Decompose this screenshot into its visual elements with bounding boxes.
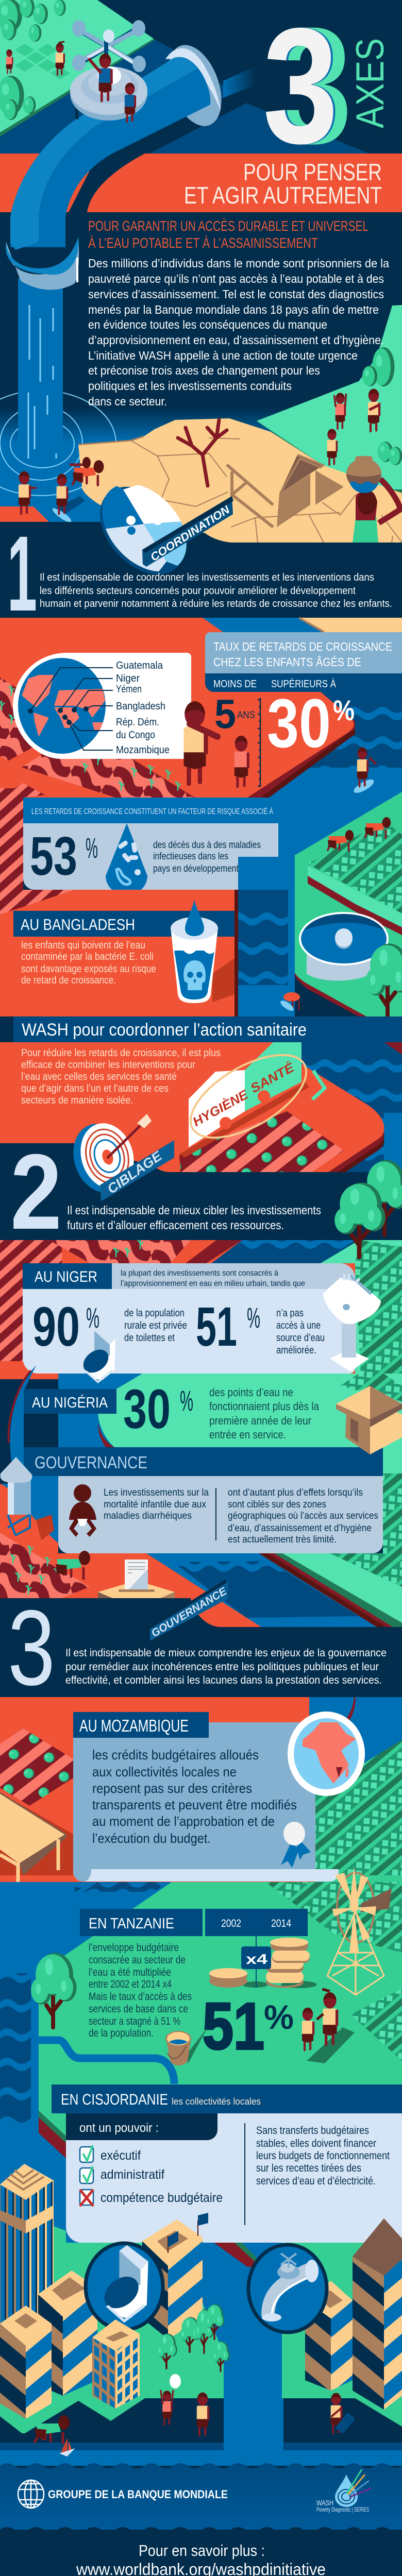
country labels: Rép. Dém. xyxy=(116,717,159,728)
illustration: target with arrow xyxy=(65,1114,152,1200)
years 2002 2014 xyxy=(205,1909,308,1936)
illustration: cracked earth xyxy=(78,418,402,543)
checklist xyxy=(80,2145,223,2206)
panel: Mozambique scroll: reposent pas sur des critères xyxy=(92,1781,252,1796)
panel: West Bank xyxy=(52,2084,402,2243)
panel: Au Niger: la plupart des investissements sont consacrés à xyxy=(121,1269,278,1278)
numeral 1: 1 xyxy=(7,514,37,634)
illustration: side field xyxy=(383,1447,402,1555)
WASH text: secteurs de manière isolée. xyxy=(21,1095,133,1106)
banner: ciblage: CIBLAGE xyxy=(104,1148,165,1197)
Nigeria text: fonctionnaient plus dès la xyxy=(209,1400,320,1413)
stat: 51 percent: 51 xyxy=(196,1295,237,1358)
icon: windmill xyxy=(327,1867,392,1995)
illustration: tap base and handle xyxy=(70,20,147,121)
illustration: child on the water xyxy=(352,748,376,795)
illustration: hygiene and health puzzle xyxy=(178,1038,325,1155)
intro text: services d’assainissement. Tel est le constat des diagnostics xyxy=(88,287,384,301)
panel: Mozambique scroll: aux collectivités locales ne xyxy=(92,1764,237,1780)
panel: West Bank: ont un pouvoir : xyxy=(79,2121,159,2135)
axis 3 text xyxy=(65,1647,387,1686)
country labels: Niger xyxy=(116,673,140,684)
intro text: pauvreté parce qu’ils n’ont pas accès à l’eau potable et à des xyxy=(88,272,384,285)
Tanzania text: l’enveloppe budgétaire xyxy=(89,1942,179,1954)
panel: stunting rate xyxy=(205,632,402,787)
illustration: tree in Tanzania xyxy=(31,1953,76,2027)
illustration: Mozambique background xyxy=(0,1697,402,1943)
illustration: hygiene and health puzzle: HYGIÈNE xyxy=(190,1087,251,1129)
panel: Mozambique scroll xyxy=(73,1712,339,1882)
banner: Au Nigeria: AU NIGÉRIA xyxy=(32,1394,108,1411)
panel: Au Niger: n’a pas xyxy=(276,1308,304,1319)
axis 3 text: effectivité, et combler ainsi les lacunes dans la prestation des services. xyxy=(65,1674,382,1686)
panel: Au Niger: accès à une xyxy=(276,1320,321,1331)
icon: water tower xyxy=(1,1457,32,1535)
illustration: ballot box xyxy=(98,1560,175,1634)
illustration: water pipe and tap xyxy=(10,38,231,250)
intro text: politiques et les investissements conduits xyxy=(88,379,292,393)
banner: Au Nigeria xyxy=(24,1389,116,1414)
Tanzania text xyxy=(89,1942,192,2039)
panel: governance details xyxy=(58,1476,383,1553)
Tanzania text: services de base dans ce xyxy=(89,2003,188,2015)
banner: Au Bangladesh xyxy=(13,911,234,937)
illustration: skyscraper xyxy=(0,2164,54,2324)
axis 1 text: les différents secteurs concernés pour pouvoir améliorer le développement xyxy=(40,585,356,597)
Nigeria text: des points d’eau ne xyxy=(209,1386,293,1399)
panel: stunting risk factor: LES RETARDS DE CROISSANCE CONSTITUENT UN FACTEUR DE RISQUE ASSOCIÉ À xyxy=(31,806,273,816)
illustration: building G and F xyxy=(305,2218,402,2410)
checklist: compétence budgétaire xyxy=(100,2191,223,2205)
Tanzania text: secteur a stagné à 51 % xyxy=(89,2015,180,2027)
Tanzania text: l’eau a été multipliée xyxy=(89,1967,171,1978)
country labels: du Congo xyxy=(116,730,155,741)
axis 1 text xyxy=(40,572,392,609)
WASH text: que d’agir dans l’un et l’autre de ces xyxy=(21,1083,169,1094)
panel: stunting risk factor xyxy=(23,798,278,895)
icon: germ drop xyxy=(106,823,147,895)
WASH text: efficace de combiner les interventions pour xyxy=(21,1059,195,1071)
stat: 90 percent: % xyxy=(86,1301,99,1334)
panel: red background Bangladesh xyxy=(0,890,238,1016)
illustration: people at the water's edge xyxy=(0,457,104,524)
illustration: ground and boat xyxy=(0,2398,402,2466)
stat: 51 percent: % xyxy=(247,1301,260,1334)
Tanzania text: de la population. xyxy=(89,2027,154,2039)
intro text: en évidence toutes les conséquences du manque xyxy=(88,318,327,331)
country labels xyxy=(116,660,170,756)
axis 1 text: Il est indispensable de coordonner les investissements et les interventions dans xyxy=(40,572,374,583)
logo: WASH Poverty Diagnostic: Poverty Diagnostic | SERIES xyxy=(316,2506,369,2513)
axis 2 text: futurs et d’allouer efficacement ces ressources. xyxy=(67,1218,284,1232)
AXES: AXES xyxy=(348,38,392,128)
intro text: et préconise trois axes de changement pour les xyxy=(88,364,320,377)
panel: Mozambique scroll: AU MOZAMBIQUE xyxy=(79,1716,189,1735)
footer: learn more xyxy=(0,2527,402,2576)
illustration: trees xyxy=(334,1160,402,1257)
logo: WASH Poverty Diagnostic xyxy=(316,2469,372,2513)
illustration: city ground and river xyxy=(0,2205,402,2442)
country labels: Bangladesh xyxy=(116,701,165,712)
Nigeria text: entrée en service. xyxy=(209,1428,286,1441)
icon: tap circle xyxy=(248,2245,327,2332)
checklist: administratif xyxy=(100,2167,164,2182)
panel: stunting risk factor: % xyxy=(86,832,98,864)
stat: 51 percent Tanzania: 51 xyxy=(203,1990,264,2063)
panel: countries globe xyxy=(13,653,191,759)
stat: 30 percent Nigeria: % xyxy=(180,1384,193,1417)
illustration: hygiene and health puzzle: SANTÉ xyxy=(248,1060,297,1096)
Bangladesh text: contaminée par la bactérie E. coli xyxy=(21,951,154,962)
illustration: puzzle disc xyxy=(100,485,187,575)
logo: World Bank globe xyxy=(18,2480,44,2508)
axis 2 text xyxy=(67,1204,321,1232)
panel: West Bank: services d’eau et d’électricité. xyxy=(256,2175,376,2187)
intro text: d’approvisionnement en eau, d’assainissement et d’hygiène. xyxy=(88,333,384,347)
stat: 5 ans xyxy=(214,691,255,737)
illustration: woman carrying a jar xyxy=(346,456,400,543)
illustration: ground below governance xyxy=(0,1533,402,1627)
title xyxy=(184,159,382,209)
WASH text xyxy=(21,1047,221,1106)
panel: West Bank: stables, elles doivent financer xyxy=(256,2138,376,2149)
banner: Gouvernance: GOUVERNANCE xyxy=(35,1453,147,1472)
years 2002 2014: 2014 xyxy=(271,1918,291,1929)
icon: concrete hut xyxy=(336,1386,402,1454)
World Bank name: GROUPE DE LA BANQUE MONDIALE xyxy=(48,2488,228,2501)
panel: Au Niger: AU NIGER xyxy=(35,1268,97,1285)
icon: contaminated glass xyxy=(171,900,218,1003)
icon: toilet xyxy=(79,1327,115,1383)
icon: hut Mozambique xyxy=(0,1793,67,1895)
Tanzania text: Mais le taux d’accès à des xyxy=(89,1991,192,2003)
illustration: raised green platform with crops xyxy=(294,792,402,1016)
banner: coordination: COORDINATION xyxy=(148,503,232,564)
intro text: Des millions d’individus dans le monde sont prisonniers de la xyxy=(88,257,389,270)
stat: 30 percent: % xyxy=(333,694,355,726)
icon: bucket xyxy=(165,2027,208,2065)
banner: Au Bangladesh: AU BANGLADESH xyxy=(21,916,135,934)
Bangladesh text: les enfants qui boivent de l’eau xyxy=(21,940,145,951)
panel: West Bank: les collectivités locales xyxy=(172,2096,261,2107)
red title band xyxy=(0,154,402,212)
panel: stunting risk factor: des décès dus à des maladies xyxy=(153,840,261,851)
panel: stunting rate: CHEZ LES ENFANTS ÂGÉS DE xyxy=(213,655,361,669)
illustration: building E with flags xyxy=(142,2213,208,2339)
intro text xyxy=(88,257,389,408)
icon: toilet circle xyxy=(86,2243,163,2330)
height ruler xyxy=(258,698,260,787)
panel: axis 1 xyxy=(0,522,402,618)
illustration: small trees xyxy=(156,2304,230,2371)
footer: logos band xyxy=(0,2463,402,2530)
panel: governance details: est actuellement très limité. xyxy=(228,1534,337,1545)
illustration: ball crops platform xyxy=(0,1042,402,1183)
checklist: exécutif xyxy=(100,2148,141,2163)
panel: stunting risk factor: infectieuses dans les xyxy=(153,851,228,862)
panel: axis 3 xyxy=(0,1598,402,1697)
Bangladesh text: sont davantage exposés au risque xyxy=(21,963,156,975)
icon: coins and x4 sign: x4 xyxy=(246,1951,268,1967)
panel: Mozambique scroll: au moment de l’approbation et de xyxy=(92,1814,275,1829)
Bangladesh text xyxy=(21,940,156,986)
illustration: blue ground behind the pipe xyxy=(0,40,369,154)
axis 3 text: pour remédier aux incohérences entre les politiques publiques et leur xyxy=(65,1661,379,1673)
globe map xyxy=(18,658,113,754)
stat: 53 percent: 53 xyxy=(30,826,77,887)
illustration: Nigeria background xyxy=(9,1365,402,1540)
icon: sink xyxy=(323,1274,381,1371)
banner: WASH: WASH pour coordonner l’action sanitaire xyxy=(22,1020,307,1040)
footer: learn more: Pour en savoir plus : xyxy=(139,2541,265,2560)
country labels: Guatemala xyxy=(116,660,163,671)
illustration: river column xyxy=(238,857,300,1016)
panel: stunting rate: SUPÉRIEURS À xyxy=(271,678,337,690)
panel: stunting risk factor: pays en développement. xyxy=(153,863,241,874)
axis 3 text: Il est indispensable de mieux comprendre les enjeux de la gouvernance xyxy=(65,1647,387,1659)
Nigeria text: première année de leur xyxy=(209,1414,311,1427)
panel: Mozambique scroll: transparents et peuvent être modifiés xyxy=(92,1797,297,1812)
years 2002 2014: 2002 xyxy=(221,1918,241,1929)
illustration: green field with children and bush xyxy=(257,305,402,495)
panel: governance details: géographiques où l’accès aux services xyxy=(228,1511,378,1521)
intro text: dans ce secteur. xyxy=(88,395,167,408)
panel: stunting rate: MOINS DE xyxy=(213,679,257,690)
illustration: left of governance xyxy=(0,1484,58,1553)
numeral 3: 3 xyxy=(8,1588,55,1708)
stat: 30 percent Nigeria: 30 xyxy=(123,1378,171,1440)
Tanzania text: entre 2002 et 2014 x4 xyxy=(89,1978,172,1990)
subtitle: À L’EAU POTABLE ET À L’ASSAINISSEMENT xyxy=(88,235,318,251)
illustration: two children xyxy=(302,1989,355,2063)
panel: Au Niger: source d’eau xyxy=(276,1332,325,1344)
illustration: children and boat at the waterfront xyxy=(35,2374,355,2456)
illustration: ground below axis 2 xyxy=(0,1240,402,1381)
illustration: dead tree xyxy=(178,420,227,486)
icon: person with diarrhea xyxy=(69,1484,96,1537)
WASH text: l’eau avec celles des services de santé xyxy=(21,1071,177,1082)
Bangladesh text: de retard de croissance. xyxy=(21,975,116,986)
panel: Au Niger xyxy=(23,1263,355,1374)
panel: Mozambique scroll: les crédits budgétaires alloués xyxy=(92,1747,259,1762)
illustration: water pool xyxy=(0,391,320,526)
illustration: front buildings xyxy=(0,2306,140,2419)
illustration: ground below axis 1 xyxy=(0,618,402,857)
panel: governance details: ont d’autant plus d’effets lorsqu’ils xyxy=(228,1487,363,1498)
numeral 2: 2 xyxy=(10,1132,62,1252)
Nigeria text xyxy=(209,1386,320,1441)
banner: WASH xyxy=(13,1016,402,1042)
banner: Gouvernance xyxy=(24,1447,383,1476)
panel: Au Niger: de la population xyxy=(124,1308,185,1319)
banner: En Tanzanie: EN TANZANIE xyxy=(89,1916,174,1932)
stat: 5 ans: ANS xyxy=(237,710,255,721)
panel: Mozambique scroll: l’exécution du budget. xyxy=(92,1831,211,1846)
panel: Au Niger: l’approvisionnement en eau en milieu urbain, tandis que xyxy=(121,1279,305,1288)
intro text: L’initiative WASH appelle à une action de toute urgence xyxy=(88,349,358,362)
icon: globe with Africa xyxy=(288,1711,365,1796)
axis 2 text: Il est indispensable de mieux cibler les investissements xyxy=(67,1204,321,1217)
illustration: adult and child xyxy=(184,701,248,787)
panel: governance details: mortalité infantile due aux xyxy=(104,1499,206,1510)
icon: coins and x4 sign xyxy=(209,1936,317,1988)
panel: axis 2 xyxy=(0,1143,402,1240)
stat: 30 percent: 30 xyxy=(267,685,331,762)
stat: 90 percent: 90 xyxy=(32,1295,80,1358)
country labels: Yémen xyxy=(116,684,142,695)
panel: Au Niger: de toilettes et xyxy=(124,1332,175,1344)
logo: WASH Poverty Diagnostic: WASH xyxy=(316,2499,333,2507)
panel: governance details: d’eau, d’assainissement et d’hygiène xyxy=(228,1523,372,1534)
illustration: green meadow with trees xyxy=(0,0,155,137)
illustration: people around the tap xyxy=(6,42,135,122)
subtitle xyxy=(88,218,368,251)
panel: governance details: sont ciblés sur des zones xyxy=(228,1499,326,1510)
panel: Au Niger: améliorée. xyxy=(276,1345,316,1356)
illustration: hut xyxy=(227,455,344,527)
panel: West Bank: EN CISJORDANIE xyxy=(61,2091,168,2108)
WASH text: Pour réduire les retards de croissance, il est plus xyxy=(21,1047,221,1059)
stat: 51 percent Tanzania: % xyxy=(264,1998,294,2036)
illustration: building B xyxy=(38,2270,97,2396)
illustration: Tanzania green ground xyxy=(0,1882,402,2274)
icon: ribbon seal xyxy=(281,1822,311,1868)
country labels: Mozambique xyxy=(116,744,170,756)
intro text: menés par la Banque mondiale dans 18 pays afin de mettre xyxy=(88,303,379,316)
panel: West Bank: Sans transferts budgétaires xyxy=(256,2125,369,2137)
panel: governance details: maladies diarrhéiques xyxy=(104,1511,192,1521)
panel: Au Niger: rurale est privée xyxy=(124,1320,187,1331)
illustration: water tank and tree xyxy=(299,912,402,1019)
banner: En Tanzanie xyxy=(80,1909,203,1936)
stat: 5 ans: 5 xyxy=(214,691,236,737)
banner: ciblage xyxy=(100,1140,174,1201)
banner: gouvernance: GOUVERNANCE xyxy=(149,1585,229,1639)
illustration: fields xyxy=(0,677,195,914)
illustration: tap mouth and falling water xyxy=(6,237,79,459)
panel: West Bank: sur les recettes tirées des xyxy=(256,2162,361,2174)
panel: governance details: Les investissements sur la xyxy=(104,1487,209,1498)
Tanzania text: consacrée au secteur de xyxy=(89,1954,186,1966)
